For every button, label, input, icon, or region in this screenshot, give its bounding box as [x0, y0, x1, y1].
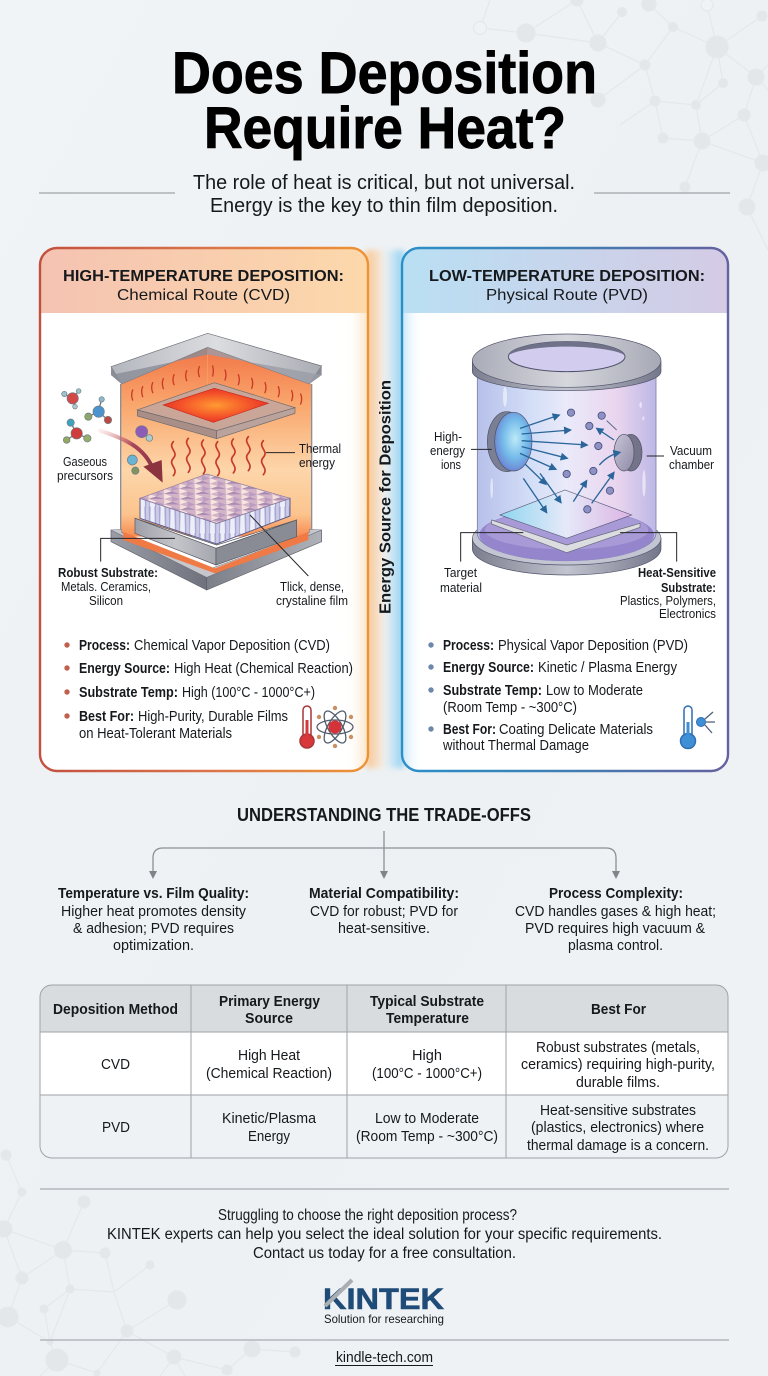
table row PVD: Kinetic/Plasma: [222, 1110, 317, 1127]
table header row: Temperature: [386, 1010, 469, 1027]
table row PVD: (Room Temp - ~300°C): [356, 1128, 498, 1145]
icon: thermometer and atom: [300, 706, 353, 748]
table row CVD: ceramics) requiring high-purity,: [521, 1056, 715, 1073]
icon: thermometer and particle: [680, 706, 715, 748]
substrate block: [135, 518, 297, 548]
call to action text: Struggling to choose the right deposition process?: [218, 1207, 517, 1224]
bullet list: PVD: Low to Moderate: [546, 683, 643, 699]
table row CVD: CVD: [101, 1056, 130, 1073]
text block: material compatibility: heat-sensitive.: [338, 920, 430, 937]
text block: material compatibility: CVD for robust; PVD for: [310, 903, 458, 920]
table row PVD: (plastics, electronics) where: [531, 1119, 704, 1136]
heading: PVD: [429, 268, 705, 304]
call to action text: KINTEK experts can help you select the ideal solution for your specific requirements.: [107, 1226, 662, 1243]
bullet list: PVD: without Thermal Damage: [442, 738, 589, 754]
right target disc: [619, 434, 642, 471]
table row PVD: Energy: [248, 1128, 290, 1145]
bullet list: CVD: on Heat-Tolerant Materials: [79, 726, 232, 742]
text block: process complexity: CVD handles gases & high heat;: [515, 903, 716, 920]
table header row: Primary Energy: [219, 993, 321, 1010]
table row CVD: [101, 1039, 715, 1091]
crystalline film: [140, 498, 290, 544]
substrate plate: [492, 520, 640, 553]
bullet list: PVD: Process:: [443, 638, 494, 654]
labels: CVD illustration: Tlick, dense,: [280, 580, 344, 594]
base ring: [472, 538, 661, 575]
subtitle: The role of heat is critical, but not universal.: [193, 172, 575, 194]
roof: [111, 333, 322, 384]
ion arrows: [520, 415, 620, 513]
bullet list: CVD: Process:: [79, 638, 130, 654]
table row CVD: (Chemical Reaction): [206, 1065, 332, 1082]
bullet list: CVD: High (100°C - 1000°C+): [182, 685, 315, 701]
table row PVD: thermal damage is a concern.: [527, 1137, 709, 1154]
table row PVD: Heat-sensitive substrates: [540, 1102, 696, 1119]
text block: material compatibility: Material Compatibility:: [309, 885, 459, 902]
callout lines CVD: [101, 453, 308, 576]
call to action text: Contact us today for a free consultation.: [253, 1245, 516, 1262]
base plate: [111, 530, 322, 590]
labels: PVD illustration: Target: [444, 566, 477, 580]
decorative molecular network bottom left: [0, 1150, 300, 1376]
heading: CVD: HIGH-TEMPERATURE DEPOSITION:: [63, 268, 344, 285]
labels: CVD illustration: crystaline film: [276, 594, 348, 608]
labels: CVD illustration: energy: [299, 456, 336, 470]
text block: temperature vs film quality: Higher heat promotes density: [61, 903, 246, 920]
text block: temperature vs film quality: & adhesion; PVD requires: [73, 920, 234, 937]
sputtered particles: [563, 409, 614, 513]
website link: kindle-tech.com: [336, 1350, 433, 1366]
call to action text: [107, 1207, 662, 1262]
heading: PVD: LOW-TEMPERATURE DEPOSITION:: [429, 268, 705, 285]
bullet list: CVD: Energy Source:: [79, 661, 170, 677]
bullet list: PVD: [428, 638, 688, 754]
bullet list: PVD: Physical Vapor Deposition (PVD): [498, 638, 688, 654]
subtitle: [39, 172, 730, 217]
table row CVD: High Heat: [238, 1047, 301, 1064]
vertical label: energy source: Energy Source for Deposition: [378, 380, 394, 614]
bullet list: CVD: High-Purity, Durable Films: [138, 709, 288, 725]
bullet list: PVD: Best For:: [443, 722, 496, 738]
logo: KINTEK: [323, 1280, 444, 1326]
labels: PVD illustration: energy: [430, 444, 466, 458]
bullet list: PVD: Energy Source:: [443, 660, 534, 676]
heater plate: [137, 383, 295, 431]
divider above website: [40, 1339, 729, 1341]
table row CVD: durable films.: [576, 1074, 660, 1091]
top ring: [472, 362, 661, 391]
labels: PVD illustration: chamber: [669, 458, 714, 472]
heading: trade-offs: UNDERSTANDING THE TRADE-OFFS: [237, 805, 531, 825]
table row PVD: Low to Moderate: [375, 1110, 479, 1127]
labels: PVD illustration: Electronics: [659, 607, 716, 621]
title: Require Heat?: [204, 96, 566, 161]
labels: PVD illustration: High-: [434, 430, 462, 444]
text block: temperature vs film quality: optimization.: [113, 937, 194, 954]
divider above call to action: [40, 1188, 729, 1190]
text block: temperature vs film quality: Temperature vs. Film Quality:: [58, 885, 249, 902]
labels: CVD illustration: precursors: [57, 469, 113, 483]
bullet list: CVD: Substrate Temp:: [79, 685, 178, 701]
heading: PVD: Physical Route (PVD): [486, 287, 648, 304]
callout lines PVD: [461, 449, 677, 562]
bullet list: PVD: Kinetic / Plasma Energy: [538, 660, 678, 676]
title: [172, 41, 597, 161]
labels: PVD illustration: ions: [441, 458, 461, 472]
bullet list: CVD: [64, 638, 353, 742]
connector arrows: [149, 831, 620, 879]
table row CVD: (100°C - 1000°C+): [372, 1065, 482, 1082]
bullet list: CVD: Chemical Vapor Deposition (CVD): [134, 638, 330, 654]
labels: PVD illustration: material: [440, 581, 482, 595]
text block: process complexity: Process Complexity:: [549, 885, 683, 902]
decorative molecular network top right: [474, 0, 768, 250]
labels: CVD illustration: Gaseous: [63, 455, 107, 469]
logo: KINTEK: Solution for researching: [324, 1312, 444, 1326]
labels: CVD illustration: Metals. Ceramics,: [61, 580, 151, 594]
illustration: CVD reactor: [62, 333, 322, 590]
text block: process complexity: PVD requires high vacuum &: [525, 920, 705, 937]
text block: process complexity: plasma control.: [568, 937, 663, 954]
table row CVD: High: [412, 1047, 442, 1064]
bullet list: PVD: (Room Temp - ~300°C): [443, 700, 577, 716]
bullet list: CVD: Best For:: [79, 709, 134, 725]
illustration: PVD vacuum chamber: [461, 334, 677, 575]
glass highlights: [490, 387, 646, 498]
labels: CVD illustration: Silicon: [89, 594, 123, 608]
table header row: [53, 993, 646, 1027]
panel: low-temperature PVD: [402, 248, 728, 773]
labels: PVD illustration: [430, 430, 716, 621]
text block: material compatibility: [309, 885, 459, 937]
bullet list: CVD: High Heat (Chemical Reaction): [174, 661, 353, 677]
table row PVD: PVD: [102, 1119, 130, 1136]
table row CVD: Robust substrates (metals,: [536, 1039, 700, 1056]
heading: CVD: [63, 268, 344, 304]
thermal waves: [172, 437, 265, 476]
left target disc: [487, 412, 526, 472]
text block: process complexity: [515, 885, 716, 954]
table row PVD: [102, 1102, 709, 1154]
table header row: Typical Substrate: [370, 993, 484, 1010]
labels: PVD illustration: Heat-Sensitive: [638, 566, 716, 580]
labels: PVD illustration: Substrate:: [661, 581, 716, 595]
labels: CVD illustration: Thermal: [299, 442, 341, 456]
title: Does Deposition: [172, 41, 597, 106]
arrow: precursor flow: [98, 430, 153, 470]
labels: CVD illustration: [57, 442, 348, 608]
bullet list: PVD: Coating Delicate Materials: [499, 722, 653, 738]
heading: CVD: Chemical Route (CVD): [117, 287, 290, 304]
labels: PVD illustration: Vacuum: [670, 444, 712, 458]
labels: CVD illustration: Robust Substrate:: [58, 566, 158, 580]
central energy band: [366, 250, 404, 768]
comparison table: [40, 985, 728, 1158]
table header row: Source: [245, 1010, 293, 1027]
text block: temperature vs film quality: [58, 885, 249, 954]
molecules: [62, 389, 153, 474]
logo: KINTEK: KINTEK: [323, 1283, 444, 1316]
subtitle: Energy is the key to thin film deposition.: [210, 195, 558, 217]
panel: high-temperature CVD: [40, 248, 368, 773]
glass cylinder: [477, 373, 656, 561]
table header row: Best For: [591, 1001, 646, 1018]
bullet list: PVD: Substrate Temp:: [443, 683, 542, 699]
table header row: Deposition Method: [53, 1001, 178, 1018]
labels: PVD illustration: Plastics, Polymers,: [620, 594, 716, 608]
